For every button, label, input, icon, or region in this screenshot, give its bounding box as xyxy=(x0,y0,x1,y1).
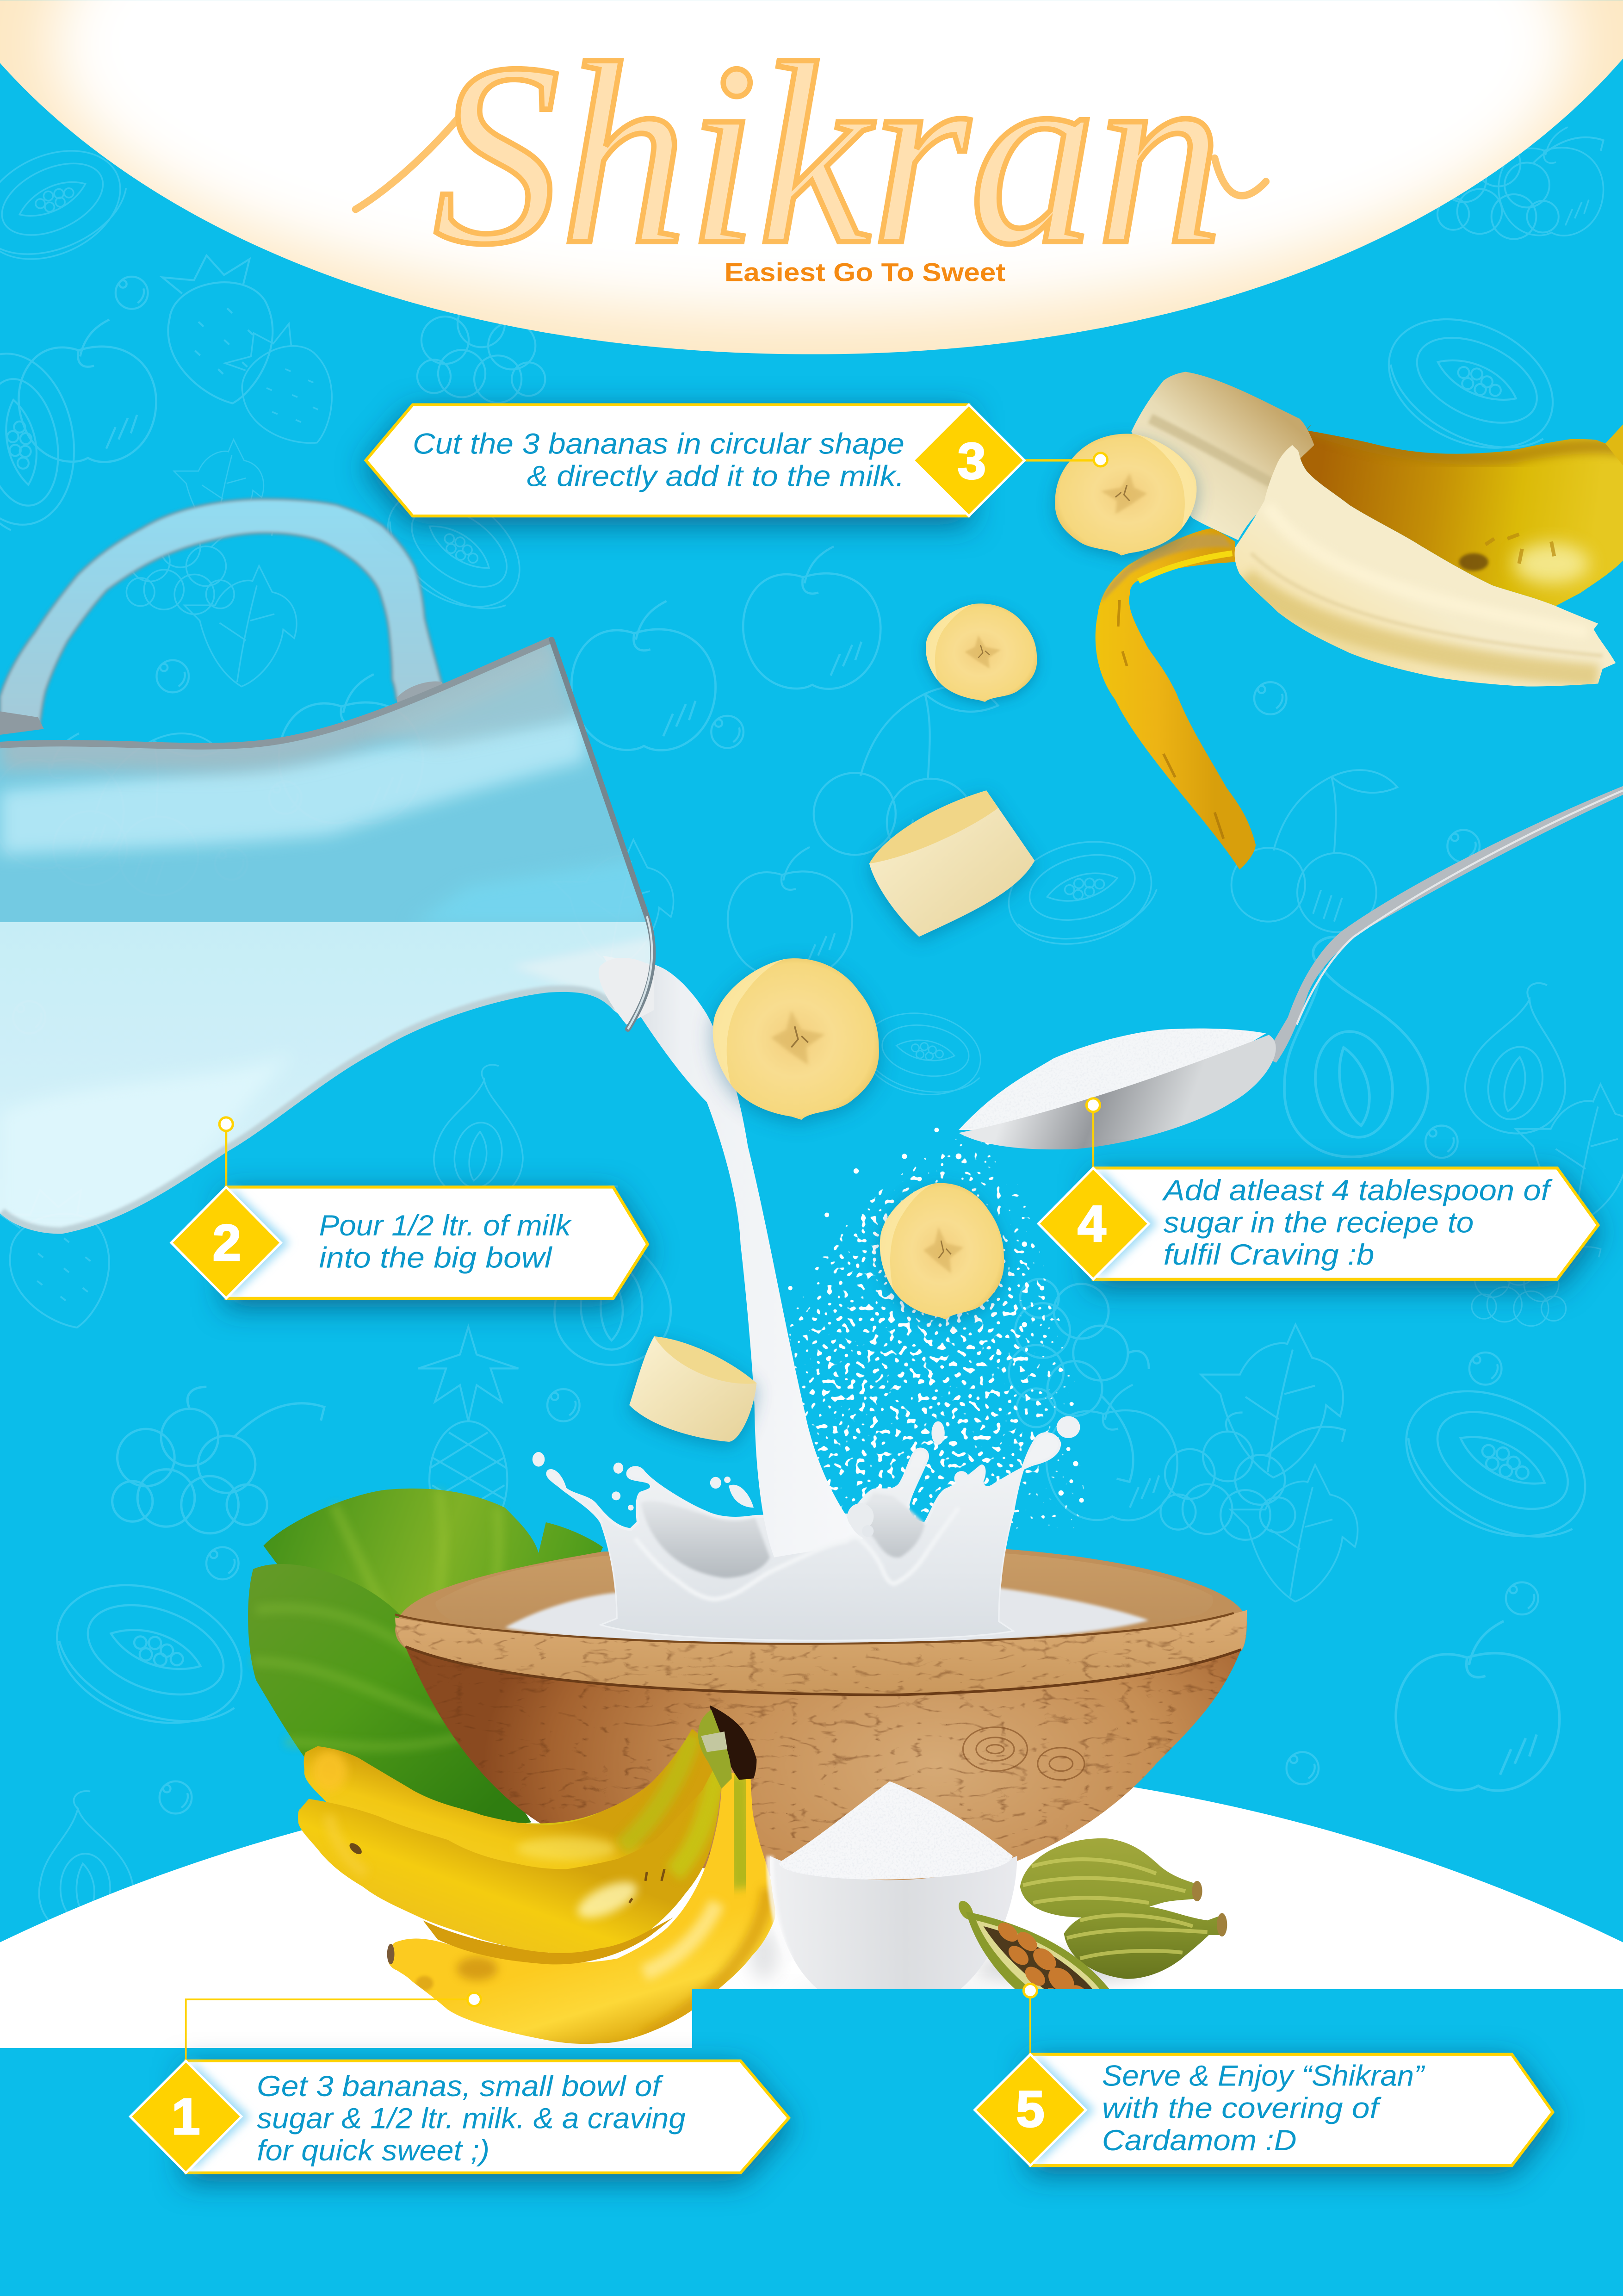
callout text xyxy=(1102,2060,1425,2157)
callout text: fulfil Craving :b xyxy=(1164,1239,1374,1271)
front lower banana xyxy=(380,1764,783,2049)
spoon handle xyxy=(1264,786,1623,1063)
callout text: Get 3 bananas, small bowl of xyxy=(257,2070,664,2103)
banana slice large xyxy=(713,958,879,1120)
banana chunk upper xyxy=(869,790,1035,937)
crown right hollow xyxy=(856,1493,925,1558)
glass jug with milk xyxy=(0,629,658,1259)
number badge xyxy=(171,1187,290,1298)
banana skin xyxy=(1288,417,1623,615)
middle banana xyxy=(293,1756,725,1961)
pod open xyxy=(956,1899,1122,2026)
banana slice second xyxy=(926,603,1037,702)
fruit line pattern xyxy=(0,124,1623,1936)
bottom white table panel xyxy=(0,1761,1623,2296)
milk surface in bowl xyxy=(505,1588,1149,1646)
bowl body xyxy=(406,1648,1240,1880)
callout text: for quick sweet ;) xyxy=(257,2135,489,2167)
wooden bowl back rim xyxy=(395,1549,1247,1651)
banana flesh peel xyxy=(1229,439,1622,691)
banana chunk lower xyxy=(629,1336,756,1442)
top cream panel xyxy=(0,0,1623,359)
callout box xyxy=(366,405,969,516)
table shadows xyxy=(750,1928,1149,2021)
falling sugar particles xyxy=(775,1120,1085,1530)
jug spout xyxy=(599,958,654,1024)
pod lower xyxy=(1064,1905,1227,1979)
peeled banana xyxy=(1096,366,1623,869)
callout text: Cut the 3 bananas in circular shape xyxy=(413,428,904,460)
spoon sugar xyxy=(959,1029,1266,1130)
jug rim xyxy=(0,639,552,746)
callout text xyxy=(1161,1174,1553,1271)
back banana sliver xyxy=(512,1729,702,1852)
cardamom pods xyxy=(956,1838,1227,2026)
title xyxy=(356,10,1266,298)
callout text: Add atleast 4 tablespoon of xyxy=(1161,1174,1553,1207)
callout text: sugar & 1/2 ltr. milk. & a craving xyxy=(257,2102,686,2135)
milk stream xyxy=(603,956,873,1558)
tropical leaf xyxy=(248,1489,603,1825)
callout text: & directly add it to the milk. xyxy=(527,460,904,492)
subtitle: Easiest Go To Sweet xyxy=(725,258,1005,286)
milk splash crown front xyxy=(533,1416,1080,1640)
jug lip edge xyxy=(552,639,653,1029)
callout box xyxy=(1093,1168,1598,1279)
banana slice beside sugar xyxy=(880,1183,1004,1320)
callout text: with the covering of xyxy=(1102,2092,1382,2124)
callout text: Cardamom :D xyxy=(1102,2124,1297,2157)
number badge xyxy=(1038,1168,1158,1279)
pod upper xyxy=(1020,1838,1202,1917)
number badge: 4 xyxy=(1078,1195,1106,1252)
callout 5 xyxy=(975,1984,1553,2166)
upper back banana xyxy=(300,1727,732,1903)
droplets xyxy=(533,1416,1080,1511)
connector and dot xyxy=(219,1117,233,1187)
callout text xyxy=(413,428,904,492)
banana peel strip xyxy=(1096,528,1256,869)
crown left hollow xyxy=(641,1501,770,1578)
callout box xyxy=(186,2061,789,2173)
callout text xyxy=(257,2070,686,2167)
bowl front band xyxy=(388,1603,1254,1705)
title: Shikran xyxy=(433,10,1223,298)
number badge: 5 xyxy=(1016,2081,1045,2138)
connector and dot xyxy=(1086,1098,1100,1168)
banana stem crown xyxy=(710,1705,756,1780)
banana slice top xyxy=(1055,434,1196,556)
sugar cup xyxy=(770,1781,1017,2007)
spoon with sugar xyxy=(959,786,1623,1149)
callout 3 xyxy=(366,405,1107,516)
number badge: 1 xyxy=(172,2088,200,2145)
callout box xyxy=(226,1187,648,1298)
number badge xyxy=(130,2061,250,2173)
callout 4 xyxy=(1038,1098,1598,1279)
banana bunch xyxy=(293,1705,783,2049)
callout box xyxy=(1030,2054,1553,2166)
banana flesh chunk xyxy=(1127,366,1320,545)
number badge xyxy=(913,405,1024,516)
number badge: 3 xyxy=(958,433,986,490)
callout 2 xyxy=(171,1117,648,1298)
connector and dot xyxy=(186,1992,481,2061)
callout text xyxy=(319,1210,572,1274)
callout text: Serve & Enjoy “Shikran” xyxy=(1102,2060,1425,2092)
callout text: sugar in the reciepe to xyxy=(1164,1207,1474,1239)
wooden bowl front xyxy=(388,1603,1254,1895)
callout text: Pour 1/2 ltr. of milk xyxy=(319,1210,572,1242)
milk splash crown back xyxy=(548,1433,1059,1640)
orange sliver xyxy=(423,1917,673,1964)
connector and dot xyxy=(1023,453,1107,466)
number badge: 2 xyxy=(213,1215,241,1272)
number badge xyxy=(975,2054,1095,2166)
callout text: into the big bowl xyxy=(319,1241,553,1274)
connector and dot xyxy=(1023,1984,1037,2054)
spoon bowl xyxy=(959,1035,1276,1149)
sugar pile xyxy=(779,1781,1013,1880)
glass jug handle xyxy=(0,499,445,735)
callout 1 xyxy=(130,1992,789,2173)
